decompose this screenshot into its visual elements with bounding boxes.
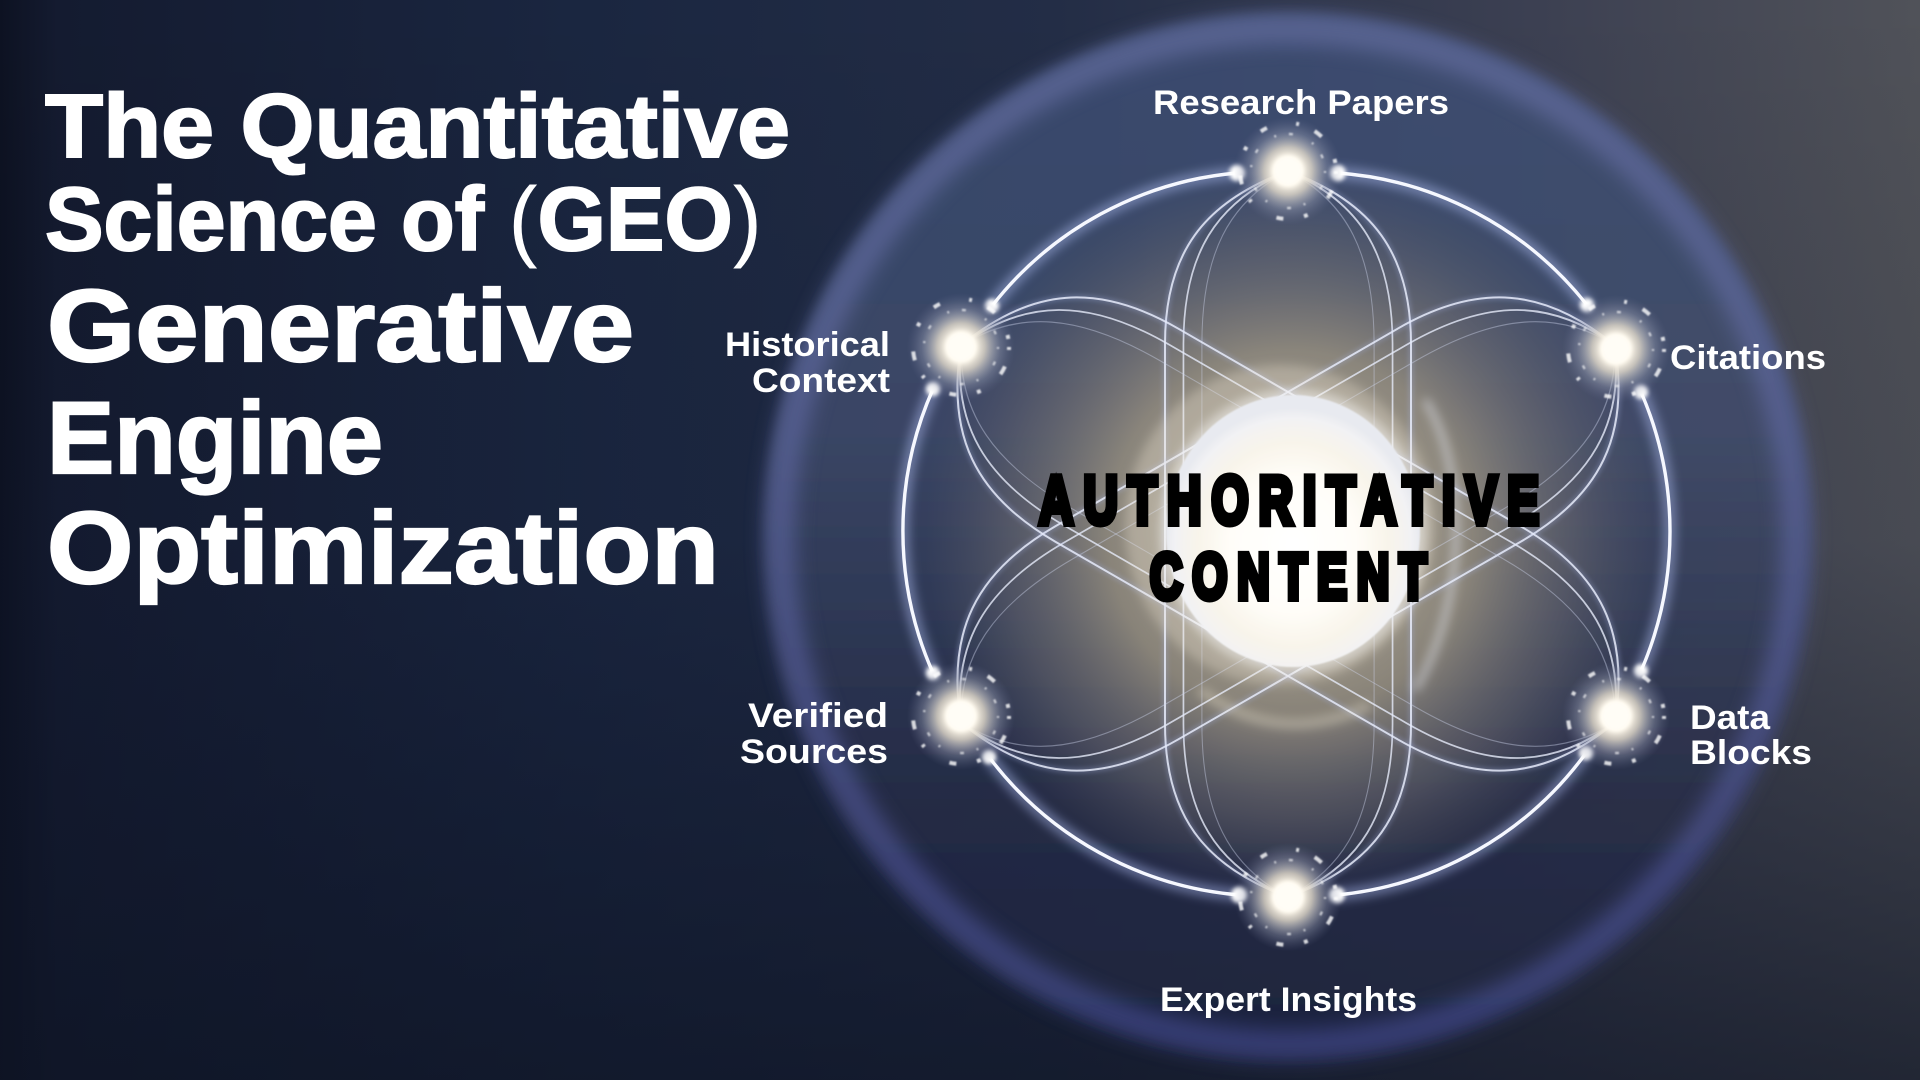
central orb xyxy=(1160,389,1426,673)
label: data blocks: Blocks xyxy=(1690,734,1812,772)
label: verified sources xyxy=(740,697,888,771)
center label xyxy=(1039,463,1549,612)
label: verified sources: Verified xyxy=(748,697,888,735)
title: Optimization xyxy=(47,491,719,605)
label: historical context: Historical xyxy=(725,326,890,364)
node: data blocks xyxy=(1562,662,1670,770)
soft shell behind core xyxy=(1125,365,1456,724)
label: historical context xyxy=(725,326,890,400)
outer ring arcs xyxy=(903,165,1670,903)
node: verified sources xyxy=(907,662,1015,770)
label: historical context: Context xyxy=(752,362,890,400)
label: data blocks: Data xyxy=(1690,699,1771,737)
title: Science of (GEO) xyxy=(45,170,762,270)
node: research papers xyxy=(1234,117,1342,225)
orbital petals xyxy=(900,171,1676,897)
title: Generative xyxy=(47,269,634,383)
node: historical context xyxy=(907,293,1015,401)
label: expert insights: Expert Insights xyxy=(1160,981,1417,1019)
title: The Quantitative xyxy=(45,77,790,177)
node: expert insights xyxy=(1234,843,1342,951)
center label: AUTHORITATIVE xyxy=(1039,463,1549,539)
label: data blocks xyxy=(1690,699,1812,772)
center label: CONTENT xyxy=(1150,541,1437,612)
title xyxy=(45,77,790,605)
outer glowing sphere xyxy=(764,13,1812,1061)
label: research papers: Research Papers xyxy=(1153,84,1449,122)
label: verified sources: Sources xyxy=(740,733,888,771)
node: citations xyxy=(1562,295,1670,403)
central warm glow xyxy=(925,168,1655,898)
title: Engine xyxy=(47,381,383,495)
label: citations: Citations xyxy=(1670,339,1826,377)
